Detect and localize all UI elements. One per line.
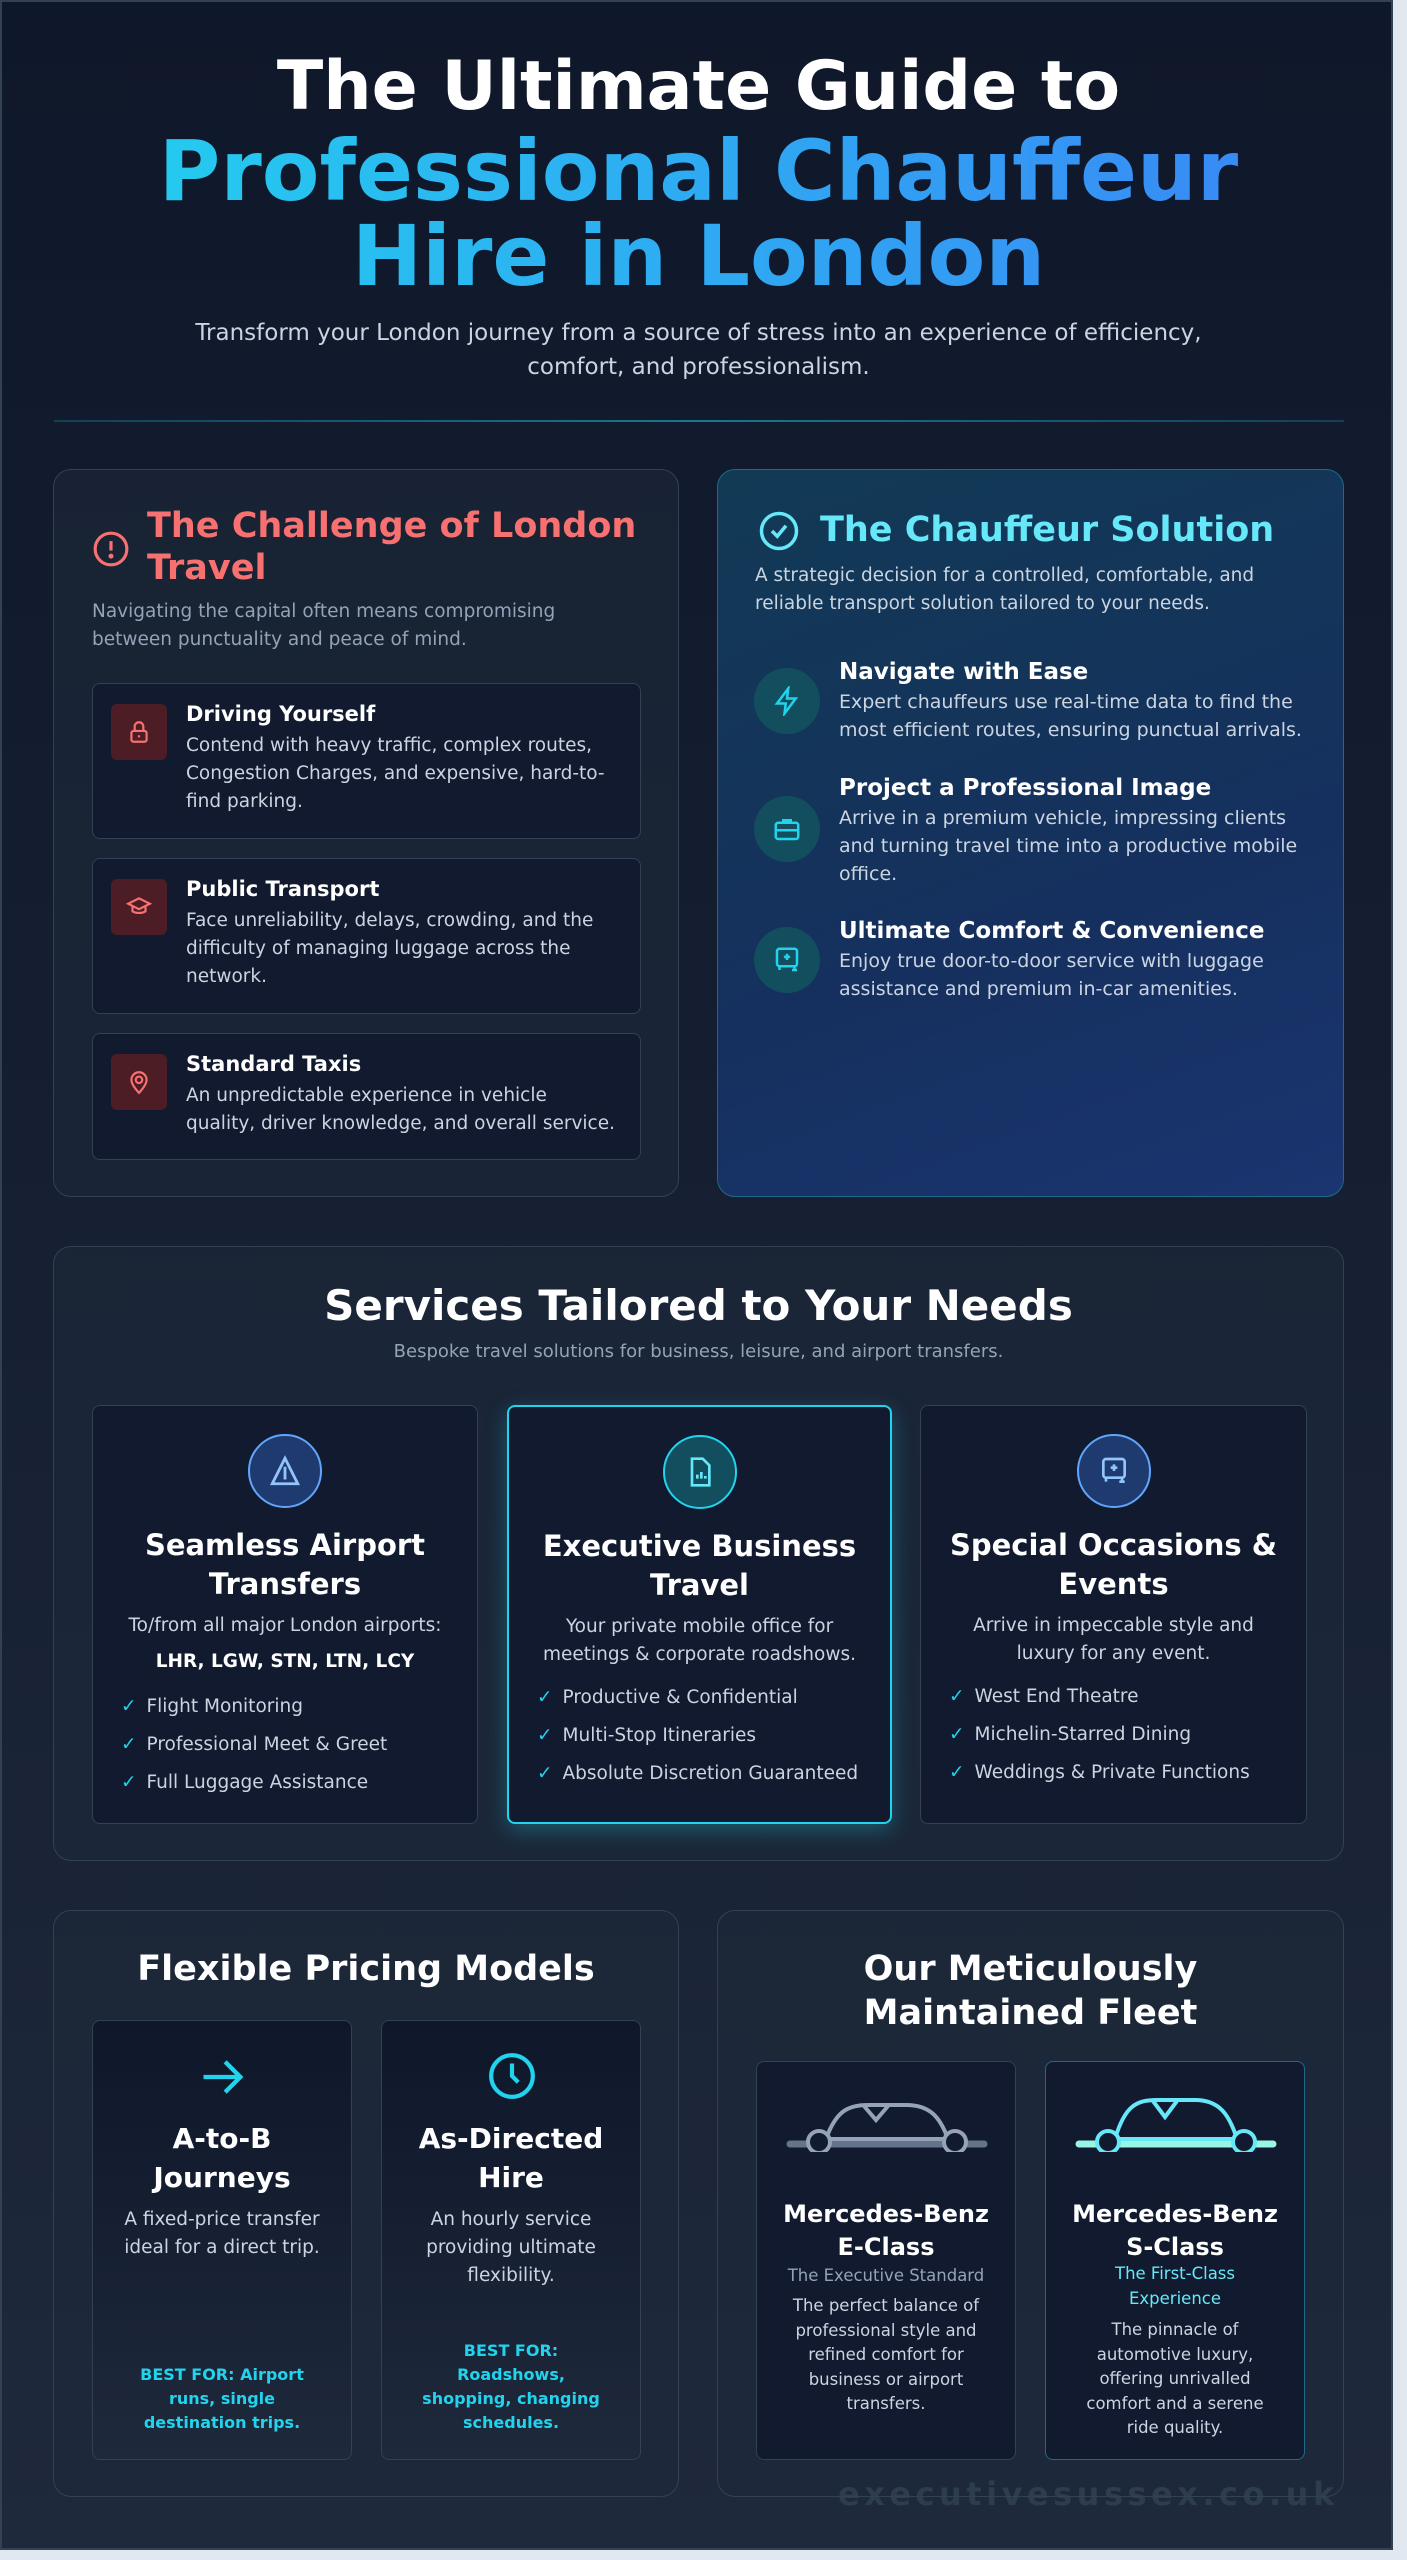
card: occasions: Arrive in impeccable style and luxury for any event. bbox=[973, 1615, 1254, 1664]
watermark: executivesussex.co.uk bbox=[838, 2475, 1339, 2513]
card: as-directed: Hire bbox=[478, 2161, 544, 2194]
icon: check bbox=[760, 512, 798, 550]
card: s-class: The pinnacle of automotive luxury, offering unrivalled comfort and a serene ride quality. bbox=[1086, 2320, 1264, 2437]
title bbox=[159, 47, 1238, 305]
card: s-class bbox=[1045, 2061, 1305, 2460]
panel: fleet bbox=[717, 1910, 1344, 2497]
text: challenge intro: Navigating the capital often means compromising bbox=[92, 601, 555, 622]
heading: fleet: Our Meticulously bbox=[864, 1949, 1197, 1989]
card: occasions: Events bbox=[1058, 1567, 1169, 1601]
card: a-to-b: BEST FOR: Airport runs, single destination trips. bbox=[140, 2365, 304, 2432]
heading: fleet bbox=[864, 1949, 1197, 2033]
card: business bbox=[507, 1405, 892, 1824]
heading: challenge: Travel bbox=[147, 548, 266, 588]
text: solution intro bbox=[755, 565, 1254, 614]
item: professional image: Project a Professional Image bbox=[839, 775, 1211, 801]
title: Professional Chauffeur bbox=[159, 122, 1238, 220]
item: navigate: Navigate with Ease bbox=[839, 659, 1088, 685]
card: business: Executive Business bbox=[543, 1529, 856, 1563]
item: professional image bbox=[754, 775, 1297, 885]
text: challenge intro bbox=[92, 601, 555, 650]
card: a-to-b: A fixed-price transfer ideal for a direct trip. bbox=[124, 2209, 320, 2258]
card: standard taxis: Standard Taxis bbox=[186, 1052, 361, 1076]
panel: challenge bbox=[53, 469, 679, 1197]
icon: alert bbox=[94, 532, 128, 566]
item: comfort: Enjoy true door-to-door service with luggage assistance and premium in-car amenities. bbox=[839, 950, 1264, 1000]
card: airport: ✓ Full Luggage Assistance bbox=[121, 1772, 368, 1793]
item: comfort bbox=[754, 918, 1264, 1000]
card: public transport: Public Transport bbox=[186, 877, 379, 901]
item: navigate: Expert chauffeurs use real-time data to find the most efficient routes, ensuring punctual arrivals. bbox=[839, 691, 1302, 741]
heading: services: Services Tailored to Your Needs bbox=[324, 1281, 1073, 1330]
panel: solution bbox=[717, 469, 1344, 1197]
text: solution intro: reliable transport solution tailored to your needs. bbox=[755, 593, 1210, 614]
text: solution intro: A strategic decision for a controlled, comfortable, and bbox=[755, 565, 1254, 586]
card: driving yourself: Driving Yourself bbox=[186, 702, 375, 726]
card: airport bbox=[92, 1405, 478, 1824]
card: as-directed: As-Directed bbox=[419, 2122, 603, 2155]
card: occasions: Special Occasions & bbox=[950, 1528, 1277, 1562]
card: airport: LHR, LGW, STN, LTN, LCY bbox=[156, 1651, 414, 1672]
card: public transport: Face unreliability, delays, crowding, and the difficulty of managing luggage across the network. bbox=[186, 910, 593, 987]
card: as-directed: An hourly service providing ultimate flexibility. bbox=[426, 2209, 596, 2286]
card: a-to-b: Journeys bbox=[153, 2161, 291, 2194]
card: business: Travel bbox=[650, 1568, 749, 1602]
item: professional image: Arrive in a premium vehicle, impressing clients and turning travel time into a productive mobile office. bbox=[839, 807, 1297, 885]
card: s-class: Mercedes-Benz bbox=[1072, 2200, 1278, 2228]
item: navigate bbox=[754, 659, 1302, 741]
panel: pricing bbox=[53, 1910, 679, 2497]
title: The Ultimate Guide to bbox=[277, 47, 1120, 126]
card: s-class: S-Class bbox=[1126, 2233, 1224, 2261]
card: airport: Seamless Airport bbox=[145, 1528, 425, 1562]
card: driving yourself bbox=[92, 683, 641, 839]
card: airport: Transfers bbox=[209, 1567, 361, 1601]
card: airport: To/from all major London airports: bbox=[128, 1615, 442, 1636]
text: challenge intro: between punctuality and peace of mind. bbox=[92, 629, 467, 650]
card: business: meetings & corporate roadshows. bbox=[543, 1644, 856, 1665]
card: a-to-b bbox=[92, 2020, 352, 2460]
card: a-to-b: A-to-B bbox=[173, 2122, 271, 2155]
card: as-directed bbox=[381, 2020, 641, 2460]
card: driving yourself: Contend with heavy traffic, complex routes, Congestion Charges, and expensive, hard-to-find parking. bbox=[186, 735, 605, 812]
card: as-directed: BEST FOR: Roadshows, shopping, changing schedules. bbox=[422, 2341, 600, 2432]
heading: solution: The Chauffeur Solution bbox=[820, 510, 1274, 550]
heading: fleet: Maintained Fleet bbox=[864, 1993, 1197, 2033]
card: business: ✓ Absolute Discretion Guaranteed bbox=[537, 1763, 858, 1784]
title: Hire in London bbox=[352, 207, 1045, 305]
text: services intro: Bespoke travel solutions for business, leisure, and airport transfers. bbox=[394, 1341, 1003, 1362]
card: standard taxis: quality, driver knowledge, and overall service. bbox=[186, 1113, 615, 1134]
card: airport: ✓ Professional Meet & Greet bbox=[121, 1734, 387, 1755]
heading: challenge: The Challenge of London bbox=[147, 506, 636, 546]
card: e-class: The Executive Standard bbox=[788, 2266, 984, 2285]
card: s-class: The First-Class Experience bbox=[1115, 2264, 1235, 2308]
card: e-class: E-Class bbox=[838, 2233, 934, 2261]
card: occasions: ✓ Weddings & Private Functions bbox=[949, 1762, 1250, 1783]
card: business: Your private mobile office for bbox=[566, 1616, 833, 1637]
item: comfort: Ultimate Comfort & Convenience bbox=[839, 918, 1264, 944]
card: business: ✓ Productive & Confidential bbox=[537, 1687, 798, 1708]
card: public transport bbox=[92, 858, 641, 1014]
heading: pricing: Flexible Pricing Models bbox=[137, 1949, 595, 1989]
card: airport: ✓ Flight Monitoring bbox=[121, 1696, 303, 1717]
card: e-class: Mercedes-Benz bbox=[783, 2200, 989, 2228]
card: e-class bbox=[756, 2061, 1016, 2460]
card: e-class: The perfect balance of professional style and refined comfort for business or airport transfers. bbox=[793, 2296, 979, 2413]
card: occasions bbox=[920, 1405, 1307, 1824]
card: standard taxis bbox=[92, 1033, 641, 1160]
card: standard taxis: An unpredictable experience in vehicle bbox=[186, 1085, 547, 1106]
card: occasions: ✓ Michelin-Starred Dining bbox=[949, 1724, 1191, 1745]
card: business: ✓ Multi-Stop Itineraries bbox=[537, 1725, 756, 1746]
heading: challenge bbox=[147, 506, 636, 588]
panel: services bbox=[53, 1246, 1344, 1861]
card: occasions: ✓ West End Theatre bbox=[949, 1686, 1138, 1707]
subtitle: Transform your London journey from a source of stress into an experience of efficiency, comfort, and professionalism. bbox=[195, 320, 1202, 380]
